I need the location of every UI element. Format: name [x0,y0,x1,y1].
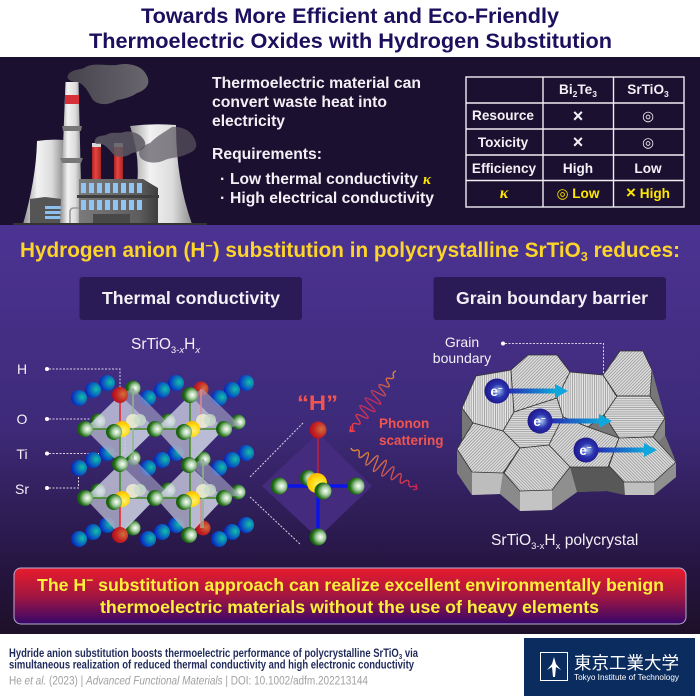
comparison table: × High [626,183,670,202]
electron three [574,438,598,462]
text: requirements list: Requirements: [212,146,322,163]
heading: hydrogen anion substitution: − [205,238,213,253]
text: thermoelectric description: convert waste heat into [212,94,387,111]
caption: polycrystal: polycrystal [560,532,638,549]
label: SrTiO3-xHx formula: x [194,345,201,356]
heading: hydrogen anion substitution: Hydrogen anion (H [20,239,210,262]
atoms: back oxygen [90,380,246,536]
label: phonon scattering [379,416,444,448]
label: phonon scattering: Phonon [379,416,429,431]
caption: polycrystal: H [544,532,556,549]
electron two: e [533,414,541,429]
chart: polycrystal grains [457,351,676,511]
comparison table: ◎ Low [557,186,600,202]
chart: SrTiO3-xHx crystal structure [71,375,254,547]
comparison table: ◎ [642,108,654,124]
title: Thermoelectric Oxides with Hydrogen Substitution [89,29,612,53]
label: SrTiO3-xHx formula: 3-x [171,345,184,356]
label: grain boundary with leader: boundary [433,350,491,366]
comparison table: Toxicity [478,135,529,150]
footer citation text: 3 [399,652,402,661]
comparison table: 3 [664,89,669,99]
title: Towards More Efficient and Eco-Friendly [141,4,559,28]
label: grain boundary with leader [433,334,604,374]
bonds [85,388,224,535]
comparison table: Efficiency [472,161,537,176]
icon: power plant [13,64,207,225]
heading: hydrogen anion substitution: ) substitution in polycrystalline SrTiO [213,239,581,262]
arrow: electron path one [505,384,568,398]
text: thermoelectric description: Thermoelectric material can [212,75,421,92]
text: requirements list: · [220,171,225,188]
crystal atom labels with leaders: H [17,361,27,377]
footer citation text: Hydride anion substitution boosts thermoelectric performance of polycrystalline SrTiO [9,648,483,660]
electron two: − [541,414,546,423]
crystal atom labels with leaders [15,361,125,497]
icon: swallow emblem [540,652,568,680]
text: requirements list: κ [423,172,432,188]
atoms: strontium row back [71,375,254,547]
text: requirements list [212,146,434,207]
footer citation text [9,648,418,688]
label: phonon scattering: scattering [379,433,444,448]
electron two [528,408,552,434]
comparison table: 2 [573,89,578,99]
comparison table: × [573,106,583,126]
label: quoted H: “H” [297,391,338,415]
logo: Tokyo Institute of Technology [524,638,695,696]
comparison table: Low [634,161,662,176]
electron three: e [579,443,587,458]
callout: conclusion: − [86,573,93,587]
logo: Tokyo Institute of Technology: Tokyo Institute of Technology [574,673,679,682]
wave: scattered phonon upper [350,371,396,432]
caption: polycrystal: 3-x [531,541,545,552]
electron one: − [498,384,503,393]
electron three: − [587,443,592,452]
callout: conclusion: substitution approach can realize excellent environmentally benign [93,575,664,595]
grain top faces [457,351,676,491]
zoom guide lines to octahedron [250,423,303,545]
atoms: titanium and veiled rear atoms [114,414,216,507]
panel: purple main background [0,225,700,634]
comparison table: × [573,132,583,152]
title [89,4,612,53]
comparison table: SrTiO [627,82,664,97]
comparison table [466,77,684,207]
caption: polycrystal: x [556,541,561,552]
arrow: electron path three [594,443,657,457]
panel: grain boundary barrier heading: Grain boundary barrier [456,288,648,308]
label: grain boundary with leader: Grain [445,334,479,350]
callout: conclusion [14,568,686,624]
callout: conclusion: thermoelectric materials without the use of heavy elements [100,597,599,617]
comparison table: ◎ [642,135,654,151]
electron one: e [490,384,498,399]
crystal atom labels with leaders: Ti [16,446,28,462]
text: requirements list: High electrical conductivity [230,190,434,207]
panel: thermal conductivity heading: Thermal conductivity [102,288,280,308]
comparison table: Te [577,82,593,97]
label: SrTiO3-xHx formula: SrTiO [131,336,171,353]
callout: conclusion: The H [37,575,86,595]
wave: scattered phonon lower [351,448,417,490]
crystal atom labels with leaders: Sr [15,481,29,497]
text: requirements list: Low thermal conductivity [230,171,418,188]
text: requirements list: · [220,190,225,207]
panel: grain boundary barrier heading [434,277,666,320]
heading: hydrogen anion substitution: 3 [581,249,588,264]
panel: dark intro band [0,57,700,225]
heading: hydrogen anion substitution: reduces: [588,239,680,262]
grain side walls [457,370,676,511]
footer citation text: He et al. (2023) | Advanced Functional Materials | DOI: 10.1002/adfm.202213144 [9,676,369,688]
label: SrTiO3-xHx formula: H [184,336,195,353]
atoms: front oxygen and hydrogen [77,387,232,543]
panel: thermal conductivity heading [80,277,302,320]
crystal atom labels with leaders: O [17,411,28,427]
text: thermoelectric description [212,75,421,130]
arrow: electron path two [548,414,612,428]
comparison table: 3 [592,89,597,99]
text: thermoelectric description: electricity [212,113,285,130]
logo: Tokyo Institute of Technology: 東京工業大学 [574,650,679,675]
electron one [484,378,510,404]
octahedra faces [85,388,240,535]
comparison table: Bi [559,82,573,97]
footer citation text: via [402,648,418,660]
footer citation text: simultaneous realization of reduced thermal conductivity and high electronic conductivity [9,660,414,672]
comparison table: High [563,161,593,176]
comparison table: κ [500,185,509,202]
comparison table: Resource [472,108,534,123]
chart: single octahedron detail [262,422,372,546]
caption: polycrystal: SrTiO [491,532,531,549]
